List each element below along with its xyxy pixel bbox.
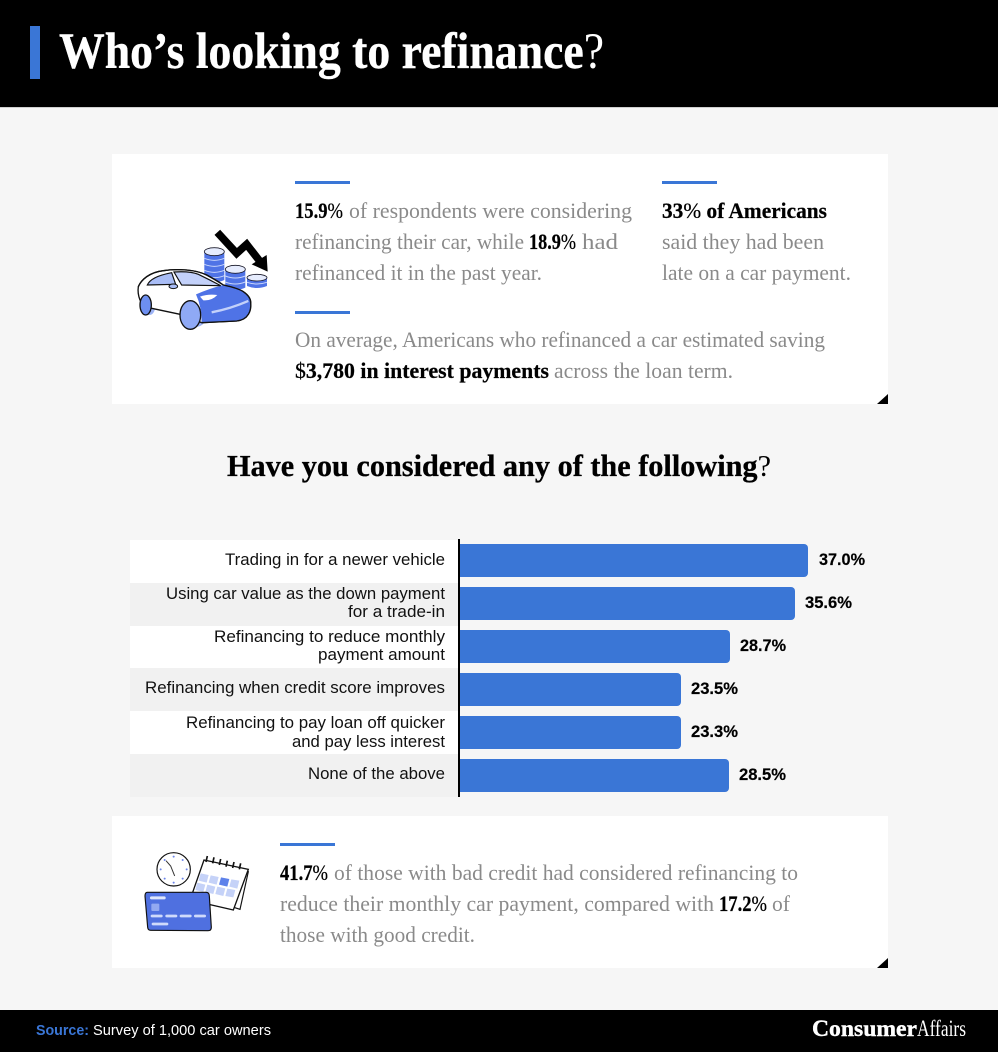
row: reduce monthly payment: 28.7% xyxy=(740,636,786,655)
text block: considering refinancing: refinanced it in the past year. xyxy=(295,260,542,285)
accent rule xyxy=(295,311,350,314)
calendar xyxy=(190,856,248,910)
icon: car with falling coins xyxy=(138,232,268,329)
text block: considering refinancing: of respondents were considering xyxy=(349,198,632,223)
row: pay off quicker: Refinancing to pay loan off quicker xyxy=(186,713,445,732)
car front panel xyxy=(196,285,251,323)
row: pay off quicker xyxy=(186,713,738,751)
text block: interest savings: $3,780 in interest payments xyxy=(295,358,549,383)
row: trading in: 37.0% xyxy=(819,550,865,569)
source text: Survey of 1,000 car owners xyxy=(93,1022,271,1039)
text block: interest savings: On average, Americans who refinanced a car estimated saving xyxy=(295,327,825,352)
text block: considering refinancing: had xyxy=(582,229,618,254)
text block: considering refinancing: 18.9% xyxy=(529,229,576,254)
header accent bar xyxy=(30,26,40,79)
text block: bad credit comparison: 41.7% xyxy=(280,860,328,885)
text block: late payments: late on a car payment. xyxy=(662,260,851,285)
text block: considering refinancing: refinancing their car, while xyxy=(295,229,524,254)
source label: Source: xyxy=(36,1022,89,1039)
row: reduce monthly payment: payment amount xyxy=(318,645,445,664)
footer band xyxy=(0,1010,998,1052)
text block: considering refinancing xyxy=(295,198,632,285)
accent rule xyxy=(280,843,335,846)
bar chart xyxy=(130,539,865,797)
row: down payment: Using car value as the down payment xyxy=(166,584,445,603)
panel: refinancing stats xyxy=(112,154,888,404)
car wheels xyxy=(140,295,151,315)
logo: ConsumerAffairs: Affairs xyxy=(917,1016,966,1041)
row: trading in: Trading in for a newer vehicle xyxy=(225,550,445,569)
corner marker xyxy=(877,394,888,404)
corner marker xyxy=(877,958,888,968)
icon: clock, calendar and credit card xyxy=(145,853,248,931)
text block: bad credit comparison: those with good credit. xyxy=(280,922,475,947)
accent rule xyxy=(295,181,350,184)
row: credit score: 23.5% xyxy=(691,679,738,698)
row: down payment: 35.6% xyxy=(805,593,852,612)
car mirror xyxy=(169,284,178,289)
row: reduce monthly payment xyxy=(214,627,786,664)
text block: bad credit comparison xyxy=(280,860,798,947)
chart heading: Have you considered any of the following? xyxy=(227,448,771,483)
text block: interest savings xyxy=(295,327,825,383)
panel: bad credit xyxy=(112,816,888,968)
coin stacks xyxy=(204,248,267,290)
chart axis xyxy=(458,539,460,797)
falling arrow xyxy=(217,232,261,262)
accent rule xyxy=(662,181,717,184)
car body xyxy=(138,270,251,323)
row: down payment xyxy=(166,584,852,621)
row: pay off quicker: and pay less interest xyxy=(292,732,445,751)
wheel shadows xyxy=(144,300,155,315)
car headlight xyxy=(200,295,217,300)
row: down payment: for a trade-in xyxy=(348,602,445,621)
clock xyxy=(157,853,190,886)
text block: interest savings: across the loan term. xyxy=(554,358,733,383)
header band xyxy=(0,0,998,108)
text block: late payments: 33% of Americans xyxy=(662,198,827,223)
row: trading in xyxy=(225,544,865,577)
text block: bad credit comparison: 17.2% xyxy=(719,891,767,916)
row: credit score: Refinancing when credit score improves xyxy=(145,678,445,697)
text block: bad credit comparison: reduce their monthly car payment, compared with xyxy=(280,891,714,916)
text block: late payments xyxy=(662,198,851,285)
text block: late payments: said they had been xyxy=(662,229,824,254)
row: none of the above xyxy=(308,759,786,792)
text block: bad credit comparison: of xyxy=(772,891,790,916)
title: Who’s looking to refinance? xyxy=(59,24,604,80)
row: pay off quicker: 23.3% xyxy=(691,722,738,741)
text block: considering refinancing: 15.9% xyxy=(295,198,343,223)
car windows xyxy=(147,273,176,285)
row: none of the above: None of the above xyxy=(308,764,445,783)
row: credit score xyxy=(145,673,738,706)
logo: ConsumerAffairs xyxy=(812,1016,966,1041)
logo: ConsumerAffairs: Consumer xyxy=(812,1016,917,1041)
credit card xyxy=(145,892,211,931)
row: reduce monthly payment: Refinancing to reduce monthly xyxy=(214,627,445,646)
text block: bad credit comparison: of those with bad credit had considered refinancing to xyxy=(334,860,798,885)
row: none of the above: 28.5% xyxy=(739,765,786,784)
